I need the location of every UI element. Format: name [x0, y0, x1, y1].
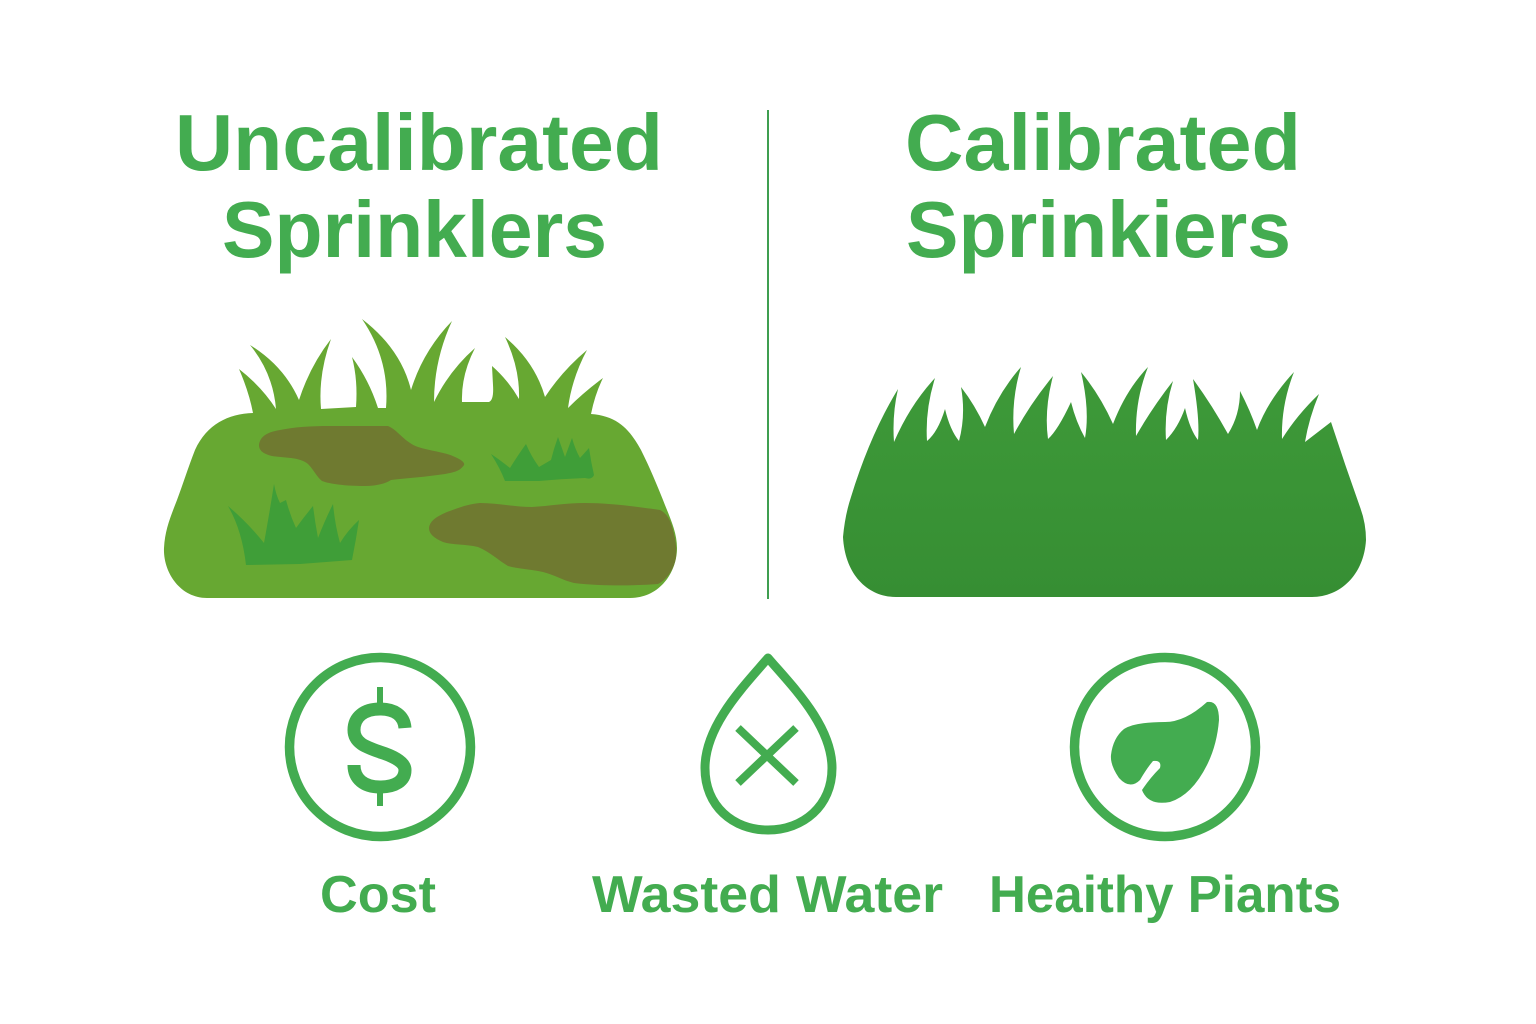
- heading: calibrated sprinklers: Calibrated: [905, 98, 1301, 187]
- heading: calibrated sprinklers: Sprinkiers: [906, 185, 1291, 274]
- x mark: [738, 728, 796, 783]
- illustration: patchy uncalibrated lawn: [164, 319, 677, 598]
- circle outline: [1074, 658, 1256, 836]
- label: wasted water: Wasted Water: [592, 866, 943, 924]
- label: cost: Cost: [320, 866, 436, 924]
- illustration: uniform calibrated lawn: [843, 367, 1366, 597]
- lawn mound with uneven grass: [164, 319, 677, 598]
- heading: calibrated sprinklers: [905, 98, 1301, 274]
- bare soil patch, lower: [429, 503, 676, 585]
- icon: healthy plants leaf: [1074, 658, 1256, 836]
- heading: uncalibrated sprinklers: Uncalibrated: [175, 98, 663, 187]
- icon: wasted water drop: [705, 658, 832, 830]
- dollar sign: [354, 687, 405, 806]
- leaf: [1111, 702, 1219, 803]
- circle outline: [290, 658, 470, 836]
- heading: uncalibrated sprinklers: [175, 98, 663, 274]
- dark grass tuft, right: [491, 437, 594, 481]
- icon: dollar cost: [290, 658, 470, 836]
- drop outline: [705, 658, 832, 830]
- label: healthy plants: Heaithy Piants: [989, 866, 1341, 924]
- dark grass tuft, left: [228, 484, 359, 565]
- heading: uncalibrated sprinklers: Sprinklers: [222, 185, 607, 274]
- bare soil patch, upper: [259, 426, 464, 486]
